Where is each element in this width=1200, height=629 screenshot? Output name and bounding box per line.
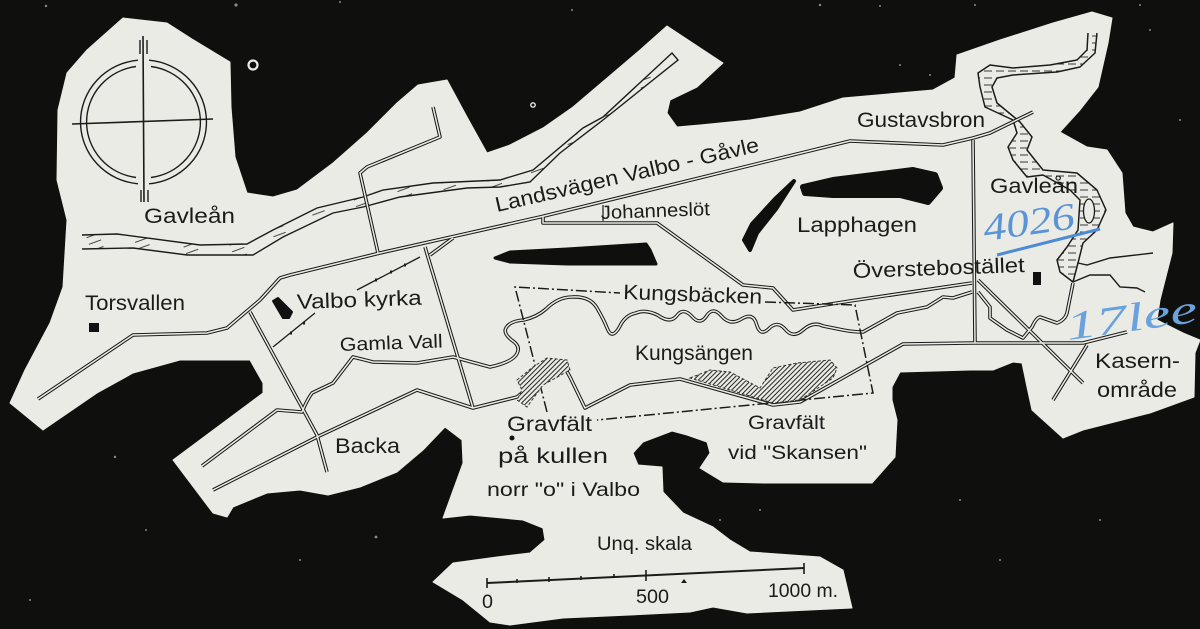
handwritten note: 17lee [1063, 286, 1200, 349]
label: Backa: Backa [335, 435, 400, 458]
label: Kungsängen: Kungsängen [635, 342, 753, 365]
burial field hatching Skansen [690, 360, 837, 403]
label: Gravfält på kullen norr o i Valbo: på kullen [498, 445, 608, 468]
labels [85, 109, 1180, 501]
label: Kungsbäcken: Kungsbäcken [623, 281, 763, 309]
handwritten catalogue number: 4026 [980, 196, 1077, 250]
reservation boundary [515, 287, 873, 420]
compass circle [72, 36, 213, 202]
label: Gravfält på kullen norr o i Valbo: norr "o" i Valbo [487, 480, 640, 501]
Johanneslöt spur [602, 205, 604, 221]
lake: central [495, 244, 656, 264]
label: Kasernområde: område [1097, 379, 1177, 402]
roads [38, 107, 1127, 490]
label: Överstebostället: Överstebostället [852, 254, 1025, 283]
burial mound dot [510, 436, 514, 440]
small ring on land-side [531, 103, 535, 107]
label: Gravfält vid Skansen: vid "Skansen" [728, 443, 867, 464]
scale bar: Unq. skala [597, 534, 692, 555]
label: Johanneslöt: Johanneslöt [600, 199, 711, 224]
label: Gavleån west: Gavleån [144, 205, 235, 228]
river Gavleån east [978, 33, 1153, 292]
handwritten catalogue number [980, 196, 1100, 255]
ring mark [248, 60, 258, 70]
road centres [38, 107, 1127, 490]
scale bar: 1000 m. [768, 581, 838, 602]
label: Kasernområde [1095, 350, 1180, 402]
label: Lapphagen: Lapphagen [797, 214, 917, 237]
burial field hatching west [517, 358, 570, 407]
railway lines near church [273, 257, 420, 347]
river Gavleån west [78, 53, 678, 255]
label: Gravfält på kullen norr o i Valbo: Gravfält [507, 413, 592, 436]
lake: Lapphagen north [803, 170, 940, 202]
Torsvallen marker [89, 323, 99, 332]
label: Gravfält på kullen norr o i Valbo [487, 413, 640, 501]
scale bar [482, 534, 838, 613]
label: Gustavsbron: Gustavsbron [857, 109, 985, 132]
label: Gavleån east: Gavleån [990, 175, 1078, 198]
label: Valbo kyrka: Valbo kyrka [296, 287, 422, 314]
scale bar: 0 [482, 592, 493, 613]
label: Kasernområde: Kasern- [1095, 350, 1180, 373]
label: Landsvägen Valbo-Gävle: Landsvägen Valbo - Gåvle [493, 134, 761, 217]
label: Gravfält vid Skansen [728, 413, 867, 464]
road outlines [38, 107, 1127, 490]
church symbol [273, 298, 292, 318]
Överstebostället marker [1033, 272, 1041, 285]
label: Gamla Vall: Gamla Vall [339, 331, 443, 356]
lake: narrow diagonal [744, 181, 794, 250]
scale bar: 500 [636, 587, 669, 608]
label: Torsvallen: Torsvallen [85, 292, 185, 315]
label: Gravfält vid Skansen: Gravfält [748, 413, 826, 434]
